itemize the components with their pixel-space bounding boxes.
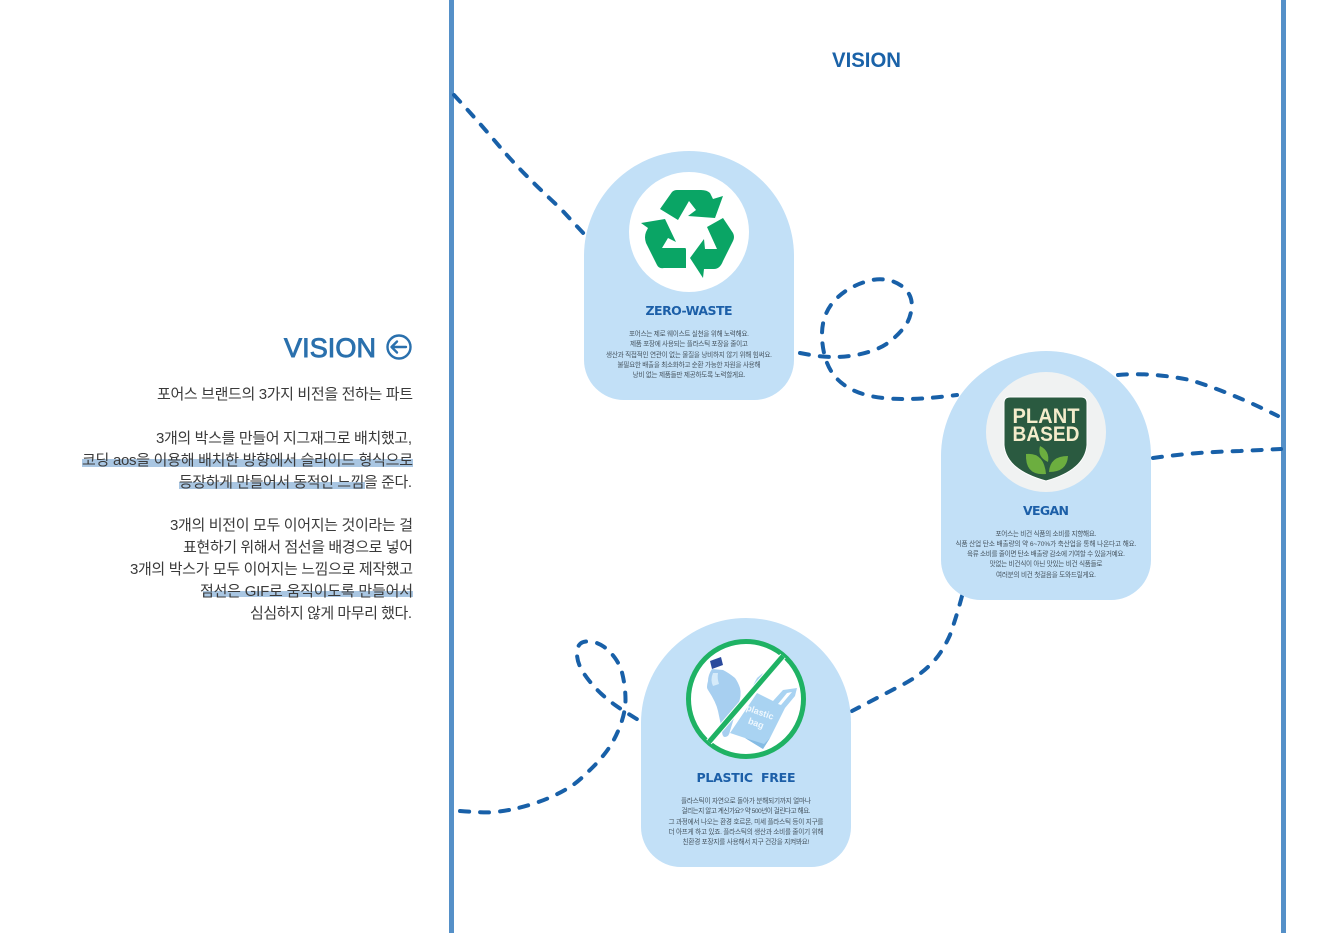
card background	[941, 351, 1151, 600]
heading: ZERO-WASTE	[646, 303, 732, 318]
body text: 코딩 aos을 이용해 배치한 방향에서 슬라이드 형식으로	[82, 452, 413, 469]
body text: 3개의 박스가 모두 이어지는 느낌으로 제작했고	[130, 561, 413, 578]
icon: plant based badge: BASED	[1012, 423, 1080, 446]
description	[606, 329, 772, 379]
description: 맛없는 비건식이 아닌 맛있는 비건 식품들로	[990, 559, 1102, 568]
body text: 등장하게 만들어서 동적인 느낌을 준다.	[179, 474, 412, 491]
heading: PLASTIC FREE	[696, 770, 796, 785]
heading: VEGAN	[1023, 503, 1069, 518]
description: 여러분의 비건 첫걸음을 도와드릴게요.	[996, 570, 1096, 579]
left description panel	[82, 333, 413, 622]
description: 낭비 없는 제품들만 제공하도록 노력할게요.	[632, 370, 746, 379]
card background	[584, 151, 794, 400]
description: 걸리는지 알고 계신가요? 약 500년이 걸린다고 해요.	[682, 806, 811, 815]
left frame bar	[449, 0, 454, 933]
description	[668, 796, 824, 846]
card background	[641, 618, 851, 867]
body text: 점선은 GIF로 움직이도록 만들어서	[200, 583, 413, 600]
panel: plastic free	[641, 618, 851, 867]
icon: plant based badge: PLANT	[1012, 405, 1080, 428]
description: 포어스는 제로 웨이스트 실천을 위해 노력해요.	[629, 329, 749, 338]
icon: recycle	[629, 172, 749, 292]
description: 식품 산업 탄소 배출량의 약 6~70%가 축산업을 통해 나온다고 해요.	[956, 539, 1137, 548]
panel: vegan	[941, 351, 1151, 600]
heading: section title: VISION	[284, 333, 376, 363]
description: 플라스틱이 자연으로 돌아가 분해되기까지 얼마나	[681, 796, 811, 805]
body text: 포어스 브랜드의 3가지 비전을 전하는 파트	[157, 386, 413, 403]
highlight strokes	[82, 459, 413, 597]
description	[956, 529, 1137, 579]
body text	[82, 386, 413, 622]
right frame bar	[1281, 0, 1286, 933]
body text: 심심하지 않게 마무리 했다.	[250, 605, 412, 622]
description: 제품 포장에 사용되는 플라스틱 포장을 줄이고	[630, 339, 748, 348]
icon: no plastic: plastic	[745, 703, 775, 722]
icon: no plastic: bag	[747, 716, 765, 731]
description: 생산과 직접적인 연관이 없는 물질을 낭비하지 않기 위해 힘써요.	[606, 350, 772, 359]
icon: circled left arrow	[388, 336, 410, 358]
body text: 3개의 박스를 만들어 지그재그로 배치했고,	[156, 430, 412, 447]
panel: zero-waste	[584, 151, 794, 400]
dashed connector lines	[454, 95, 1281, 812]
description: 그 과정에서 나오는 환경 호르몬, 미세 플라스틱 등이 지구를	[668, 817, 824, 826]
description: 육류 소비를 줄이면 탄소 배출량 감소에 기여할 수 있을거예요.	[967, 549, 1125, 558]
heading: page title: VISION	[832, 49, 901, 72]
body text: 3개의 비전이 모두 이어지는 것이라는 걸	[170, 517, 413, 534]
description: 불필요한 배출을 최소화하고 순환 가능한 자원을 사용해	[618, 360, 760, 369]
description: 친환경 포장지를 사용해서 지구 건강을 지켜봐요!	[682, 837, 810, 846]
icon: plant based badge	[986, 372, 1106, 492]
description: 더 아프게 하고 있죠. 플라스틱의 생산과 소비를 줄이기 위해	[668, 827, 824, 836]
description: 포어스는 비건 식품의 소비를 지향해요.	[996, 529, 1097, 538]
icon: no plastic	[688, 641, 804, 757]
body text: 표현하기 위해서 점선을 배경으로 넣어	[183, 539, 413, 556]
